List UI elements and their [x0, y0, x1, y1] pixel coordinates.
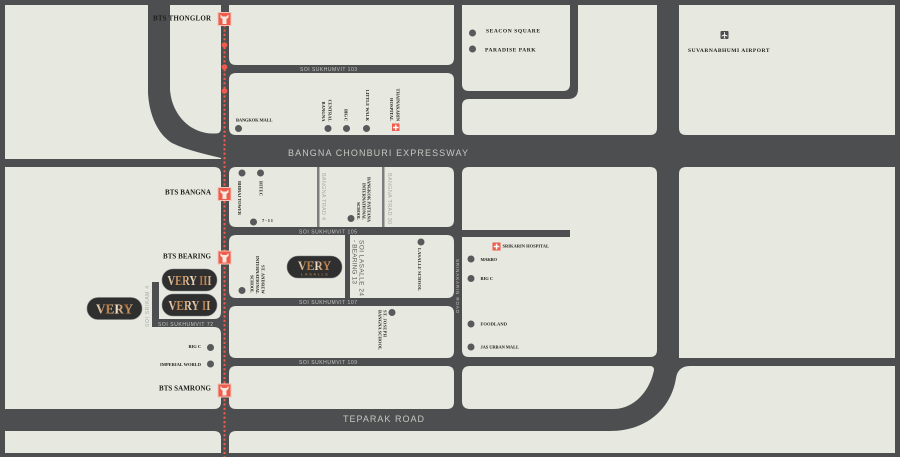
project logo: Very II	[162, 294, 217, 316]
places: Seacon and Paradise: PARADISE PARK	[485, 48, 536, 54]
places: Lasalle block: INTERNATIONAL	[255, 256, 260, 294]
places: upper central block: LITTLE WALK	[365, 90, 370, 121]
places: Srinakarin road: MAKRO	[480, 257, 497, 262]
project logo: Very II: VERY II	[168, 299, 210, 314]
places: Srinakarin road: BIG C	[480, 276, 493, 281]
places: Srinakarin road	[468, 242, 549, 350]
project logo: Very Lasalle: VERY	[298, 258, 332, 273]
places: Seacon and Paradise: SEACON SQUARE	[486, 28, 540, 34]
project logo: Very	[87, 298, 142, 320]
soi labels: BANGNA TRAD 30	[386, 173, 392, 224]
places: upper central block: HOSPITAL	[389, 98, 394, 121]
places: Bangna Trad block: BANGKOK PATTANA	[366, 177, 372, 223]
BTS Bearing station: BTS BEARING	[163, 252, 212, 260]
BTS Samrong station: BTS SAMRONG	[159, 384, 212, 392]
project logo: Very: VERY	[96, 302, 133, 318]
icon: airport	[720, 31, 728, 39]
places: Lasalle block	[238, 238, 424, 350]
bangna trad lanes	[317, 167, 384, 227]
soi labels: SOI SUKHUMVIT 107	[299, 300, 357, 306]
side roads	[152, 230, 570, 334]
places: Srinakarin road: FOODLAND	[480, 322, 508, 326]
BTS Bearing station	[163, 251, 231, 264]
places: upper central block: BIG C	[344, 109, 348, 121]
soi labels: SOI SUKHUMVIT 72	[158, 322, 213, 328]
places: upper central block: THAINAKARIN	[396, 88, 400, 122]
BTS line	[222, 25, 227, 457]
soi labels: SRINAKARIN ROAD	[455, 259, 460, 314]
places: upper central block	[235, 88, 400, 132]
soi labels: SOI LASALLE 24	[358, 240, 364, 296]
soi labels: - BEARING 13	[350, 240, 358, 284]
BTS Samrong station	[159, 384, 231, 397]
places: Lasalle block: ST. JOSEPH	[382, 310, 388, 337]
places: west of Sukhumvit	[160, 344, 214, 368]
places: Bangna Trad block: SCHOOL	[356, 202, 361, 220]
places: Lasalle block: BANGNA SCHOOL	[378, 310, 382, 350]
project logo: Very Lasalle	[287, 256, 342, 278]
soi labels: SOI SUKHUMVIT 105	[299, 230, 357, 236]
places: Srinakarin road: SRIKARIN HOSPITAL	[502, 244, 549, 248]
places: Bangna Trad block: 7-11	[262, 218, 274, 223]
places: Lasalle block: SCHOOL	[250, 275, 254, 293]
places: Lasalle block: ST. ANDREW	[260, 265, 266, 294]
places: upper central block: CENTRAL	[328, 100, 332, 122]
BTS Bangna station: BTS BANGNA	[165, 188, 211, 196]
BTS Thonglor station: BTS THONGLOR	[153, 14, 212, 22]
soi labels: SOI SUKHUMVIT 109	[299, 360, 357, 366]
soi labels: BANGNA TRAD 4	[320, 173, 326, 220]
project logo: Very III: VERY III	[168, 274, 212, 289]
main road label: Bangna Chonburi Expressway: BANGNA CHONBURI EXPRESSWAY	[288, 148, 468, 158]
places: Bangna Trad block: INTERNATIONAL	[362, 183, 366, 220]
soi labels: SOI SRIKAM 4	[145, 286, 151, 327]
places: upper central block: BANGKOK MALL	[236, 118, 272, 122]
main road label: Teparak Road: TEPARAK ROAD	[343, 414, 424, 424]
BTS Thonglor station	[153, 12, 231, 26]
places: west of Sukhumvit: IMPERIAL WORLD	[160, 362, 202, 367]
BTS Bangna station	[165, 188, 231, 200]
soi labels: SOI SUKHUMVIT 103	[300, 67, 357, 73]
places: Lasalle block: LASALLE SCHOOL	[417, 248, 422, 291]
project logo: Very Lasalle: LASALLE	[301, 272, 328, 276]
places: Bangna Trad block: BHIRAJ TOWER	[237, 181, 242, 216]
places: Bangna Trad block: BITEC	[258, 181, 264, 196]
label: Suvarnabhumi Airport: SUVARNABHUMI AIRPORT	[688, 48, 770, 54]
places: Seacon and Paradise	[469, 28, 540, 54]
places: upper central block: BANGNA	[321, 102, 326, 122]
places: Bangna Trad block	[237, 170, 372, 226]
places: Srinakarin road: JAS URBAN MALL	[480, 344, 519, 350]
soi labels	[145, 67, 460, 366]
project logo: Very III	[162, 269, 217, 291]
places: west of Sukhumvit: BIG C	[188, 344, 201, 349]
